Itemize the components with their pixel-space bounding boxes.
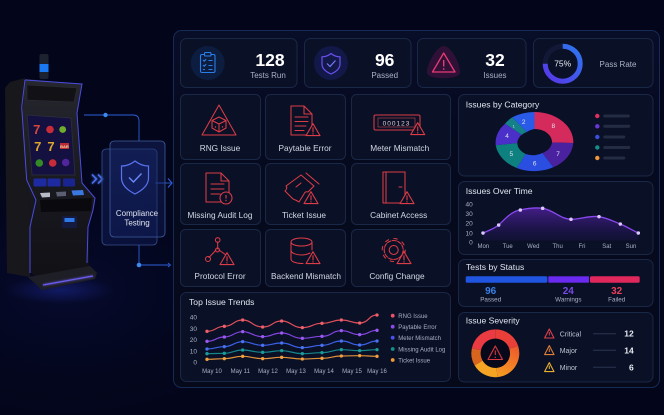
icon: document warning — [291, 106, 320, 136]
tile: paytable error — [266, 94, 346, 160]
icon: door warning — [383, 172, 414, 204]
compliance testing card — [102, 141, 165, 245]
label: Meter Mismatch — [370, 143, 430, 153]
failed stat — [608, 286, 626, 304]
y axis labels: 40 — [190, 314, 197, 322]
game screen with reels — [27, 115, 75, 175]
label: Backend Mismatch — [271, 271, 341, 281]
game screen with reels: 7 — [33, 122, 40, 137]
major row: 14 — [624, 345, 634, 355]
tile: config change — [352, 230, 450, 286]
y axis labels: 30 — [465, 211, 473, 218]
legend: RNG Issue — [398, 314, 428, 320]
x axis labels: Wed — [527, 244, 539, 250]
donut chart: 4 — [505, 133, 509, 140]
top display — [27, 85, 77, 102]
y axis labels: 10 — [465, 230, 473, 238]
warnings stat: 24 — [563, 286, 574, 297]
x axis labels — [477, 244, 636, 250]
donut chart — [496, 112, 573, 171]
donut chart: 8 — [551, 123, 555, 130]
icon: clipboard — [191, 46, 225, 80]
failed stat: Failed — [608, 297, 626, 304]
panel: top issue trends — [180, 292, 450, 382]
game screen with reels: BAR — [60, 144, 69, 149]
button strip — [34, 178, 92, 212]
passed stat — [480, 286, 502, 304]
KPI: tests run — [180, 38, 297, 88]
chart title: Tests by Status — [466, 262, 524, 272]
value: 128 — [255, 50, 285, 70]
icon: meter warning: 000123 — [383, 120, 410, 128]
tile: missing audit log — [180, 164, 260, 224]
major row: Major — [560, 348, 578, 355]
tile: backend mismatch — [266, 230, 346, 286]
panel: issue severity — [458, 312, 653, 382]
label: Protocol Error — [194, 271, 246, 281]
passed stat: 96 — [485, 286, 497, 297]
tile: meter mismatch — [352, 94, 450, 160]
caption: Issues — [483, 71, 507, 80]
donut chart: 6 — [533, 160, 537, 168]
donut chart: 2 — [522, 119, 526, 126]
x axis labels: May 16 — [367, 369, 387, 375]
chart title: Issue Severity — [466, 316, 520, 326]
label: RNG Issue — [200, 143, 241, 153]
x axis labels: Sat — [602, 244, 612, 250]
y axis labels: 30 — [190, 326, 197, 333]
panel: issues over time — [458, 182, 653, 254]
card label: Testing — [124, 218, 150, 228]
legend — [595, 114, 630, 160]
donut chart: 5 — [509, 151, 513, 158]
value: 32 — [485, 50, 505, 70]
cabinet body — [5, 78, 97, 290]
gauge value: 75% — [554, 58, 572, 68]
chart title: Issues by Category — [466, 100, 540, 110]
critical row — [545, 329, 634, 339]
donut chart: 7 — [556, 151, 560, 158]
panel: issues by category — [458, 94, 653, 176]
legend: Missing Audit Log — [398, 347, 445, 353]
icon: dice triangle — [202, 105, 236, 135]
game screen with reels: 7 — [47, 139, 55, 154]
warnings stat — [555, 286, 581, 304]
caption: Passed — [371, 71, 398, 80]
warnings stat: Warnings — [555, 297, 581, 304]
y axis labels: 10 — [190, 348, 197, 356]
KPI: issues — [418, 38, 526, 88]
tile: ticket issue — [266, 164, 346, 224]
stacked bar — [466, 276, 640, 283]
icon: alert — [427, 46, 460, 78]
label: Ticket Issue — [282, 210, 326, 220]
label: Cabinet Access — [370, 210, 427, 220]
line chart — [205, 313, 379, 361]
icon: database warning — [291, 238, 320, 264]
label: Missing Audit Log — [187, 210, 253, 220]
caption: Pass Rate — [600, 60, 637, 69]
KPI: pass rate — [534, 38, 653, 88]
icon: gear warning — [382, 238, 411, 264]
label: Paytable Error — [278, 143, 332, 153]
chart title: Top Issue Trends — [189, 297, 254, 307]
y axis labels: 40 — [465, 201, 473, 208]
icon: shield check — [122, 161, 148, 194]
icon: document alert — [206, 173, 232, 204]
KPI: passed — [304, 38, 411, 88]
legend: Paytable Error — [398, 325, 437, 331]
y axis labels — [465, 201, 473, 246]
x axis labels: May 10 — [202, 369, 222, 375]
tile: RNG issue — [180, 94, 260, 160]
passed stat: Passed — [480, 297, 502, 304]
legend: Ticket Issue — [398, 358, 431, 364]
legend: Meter Mismatch — [398, 336, 441, 342]
y axis labels — [190, 314, 197, 366]
input chevrons — [92, 174, 102, 184]
value: 96 — [375, 50, 395, 70]
label: Config Change — [369, 271, 425, 281]
area chart — [481, 207, 640, 241]
donut chart: 1 — [513, 123, 516, 128]
x axis labels: Mon — [477, 244, 489, 250]
y axis labels: 0 — [469, 240, 473, 246]
critical row: Critical — [560, 331, 582, 338]
card label: Compliance — [116, 209, 159, 218]
y axis labels: 20 — [190, 337, 197, 344]
panel: tests by status — [458, 260, 653, 306]
donut gauge — [545, 46, 580, 81]
minor row: Minor — [560, 365, 578, 372]
x axis labels: May 13 — [286, 369, 306, 375]
y axis labels: 0 — [193, 360, 197, 366]
icon: tickets warning — [285, 173, 319, 204]
x axis labels: Thu — [553, 244, 563, 250]
beacon light — [40, 54, 48, 79]
chart title: Issues Over Time — [466, 186, 533, 196]
major row — [545, 345, 634, 355]
x axis labels: May 12 — [258, 369, 278, 375]
x axis labels — [202, 369, 387, 375]
x axis labels: May 15 — [342, 369, 362, 375]
severity donut — [476, 334, 515, 373]
tile: cabinet access — [352, 164, 450, 224]
x axis labels: Sun — [626, 244, 636, 250]
minor row: 6 — [629, 362, 634, 372]
icon: shield — [314, 46, 348, 80]
dashboard panel — [174, 30, 660, 388]
slot machine — [5, 54, 115, 304]
tile: protocol error — [180, 230, 260, 286]
icon: network warning — [206, 238, 234, 265]
failed stat: 32 — [611, 286, 623, 297]
bill acceptor — [62, 216, 77, 228]
game screen with reels: 7 — [34, 139, 41, 154]
x axis labels: Tue — [503, 244, 513, 250]
connector lines — [84, 113, 172, 267]
x axis labels: Fri — [578, 244, 586, 250]
minor row — [545, 362, 634, 372]
critical row: 12 — [624, 329, 634, 339]
caption: Tests Run — [250, 71, 286, 80]
legend — [391, 314, 445, 364]
y axis labels: 20 — [465, 220, 473, 228]
x axis labels: May 11 — [231, 369, 251, 375]
x axis labels: May 14 — [314, 369, 334, 375]
